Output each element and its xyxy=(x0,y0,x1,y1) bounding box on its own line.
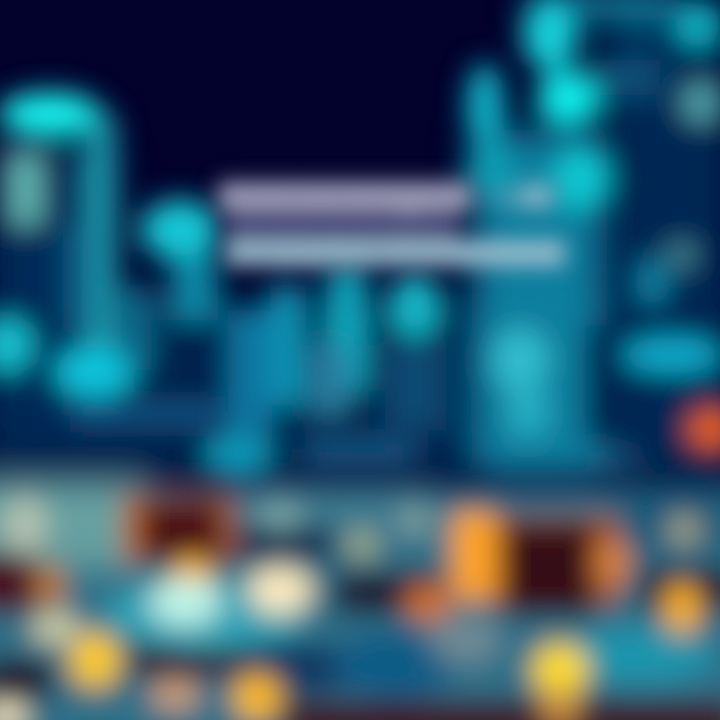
title text: of xyxy=(492,180,559,213)
right tower xyxy=(466,0,720,470)
title text xyxy=(218,180,565,268)
left tower xyxy=(0,92,135,430)
icon: pale coins centre xyxy=(35,513,700,626)
title xyxy=(218,180,565,268)
middle towers xyxy=(70,199,640,477)
panel: city skyline xyxy=(0,0,720,480)
icon: orange light xyxy=(688,409,720,449)
title text: Advantages xyxy=(218,180,473,213)
icon: right brown stack xyxy=(405,510,630,622)
icon: left brown stack xyxy=(122,495,234,592)
title text: Crypto Finance xyxy=(225,237,565,268)
panel: lower foreground xyxy=(0,478,720,720)
icon: gold coins xyxy=(0,582,700,720)
